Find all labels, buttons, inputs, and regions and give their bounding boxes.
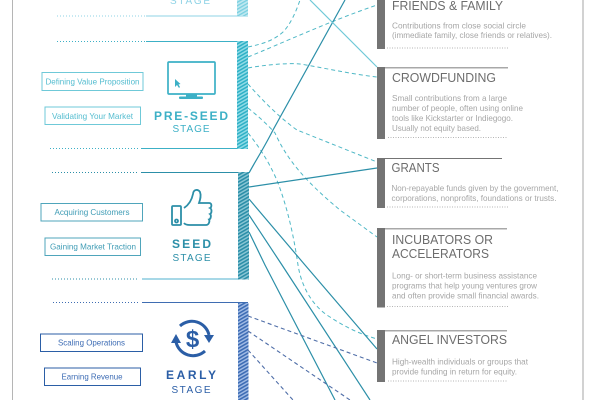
- description: incubators or accelerators: [392, 272, 539, 300]
- heading: seed stage: STAGE: [172, 253, 211, 264]
- description: crowdfunding: number of people, often using online: [392, 104, 523, 113]
- panel: crowdfunding: [377, 67, 523, 139]
- panel: angel investors: [377, 330, 529, 382]
- label: validating your market: Validating Your Market: [52, 112, 134, 121]
- panel: early stage: [40, 302, 248, 400]
- label: validating your market: [45, 107, 140, 124]
- description: angel investors: provide funding in return for equity.: [392, 368, 517, 376]
- description: crowdfunding: Usually not equity based.: [392, 124, 481, 133]
- heading: seed stage: SEED: [172, 237, 211, 251]
- label: scaling operations: Scaling Operations: [58, 338, 125, 348]
- title: angel investors: ANGEL INVESTORS: [392, 332, 507, 347]
- icon: thumbs up: [172, 190, 212, 225]
- description: friends and family: [392, 22, 552, 40]
- label: gaining market traction: [45, 238, 140, 256]
- panel: seed stage: [41, 172, 249, 280]
- description: incubators or accelerators: and often provide small financial awards.: [392, 292, 539, 300]
- heading: early stage: STAGE: [172, 385, 211, 396]
- label: defining value proposition: [42, 72, 143, 90]
- description: angel investors: High-wealth individuals or groups that: [392, 358, 529, 366]
- title: incubators or accelerators: INCUBATORS OR: [392, 232, 493, 247]
- heading: pre-seed stage: STAGE: [172, 124, 210, 135]
- heading: pre-seed stage: [154, 109, 228, 135]
- icon: computer monitor: [168, 62, 215, 99]
- description: incubators or accelerators: Long- or short-term business assistance: [392, 272, 537, 280]
- label: defining value proposition: Defining Value Proposition: [46, 78, 140, 86]
- panel: top stage remainder: [57, 0, 248, 42]
- description: grants: Non-repayable funds given by the government,: [392, 184, 558, 193]
- title: incubators or accelerators: ACCELERATORS: [392, 246, 489, 261]
- panel: grants: [377, 158, 558, 208]
- connector lines: dashed early: [248, 316, 377, 400]
- heading: early stage: [166, 368, 216, 396]
- connector lines: dashed pre-seed: [248, 0, 377, 339]
- connector lines: solid: [249, 0, 377, 400]
- icon: dollar with arrows: $: [186, 326, 200, 353]
- connector line: light solid crowdfunding: [310, 0, 377, 67]
- description: angel investors: [392, 358, 529, 376]
- title: crowdfunding: CROWDFUNDING: [392, 70, 496, 85]
- description: crowdfunding: tools like Kickstarter or Indiegogo.: [392, 114, 513, 123]
- description: crowdfunding: [392, 94, 523, 133]
- title: grants: GRANTS: [392, 160, 440, 175]
- icon: dollar with arrows: [171, 321, 214, 356]
- description: friends and family: Contributions from close social circle: [392, 22, 526, 30]
- label: gaining market traction: Gaining Market Traction: [50, 242, 136, 252]
- label: scaling operations: [40, 334, 142, 352]
- label: earning revenue: [44, 368, 140, 386]
- description: grants: corporations, nonprofits, foundations or trusts.: [392, 194, 556, 203]
- panel: pre-seed stage: [42, 41, 248, 149]
- description: friends and family: (immediate family, close friends or relatives).: [392, 31, 552, 40]
- panel: friends and family: [377, 0, 552, 49]
- heading: pre-seed stage: PRE-SEED: [154, 109, 228, 123]
- heading: early stage: EARLY: [166, 368, 216, 382]
- label: earning revenue: Earning Revenue: [62, 372, 123, 382]
- label: acquiring customers: Acquiring Customers: [54, 208, 130, 217]
- title: incubators or accelerators: [392, 232, 493, 261]
- description: crowdfunding: Small contributions from a large: [392, 94, 507, 103]
- description: grants: [392, 184, 558, 203]
- label: acquiring customers: [41, 204, 142, 221]
- panel: incubators or accelerators: [377, 228, 539, 308]
- description: incubators or accelerators: programs that help young ventures grow: [392, 282, 537, 290]
- heading: seed stage: [172, 237, 211, 264]
